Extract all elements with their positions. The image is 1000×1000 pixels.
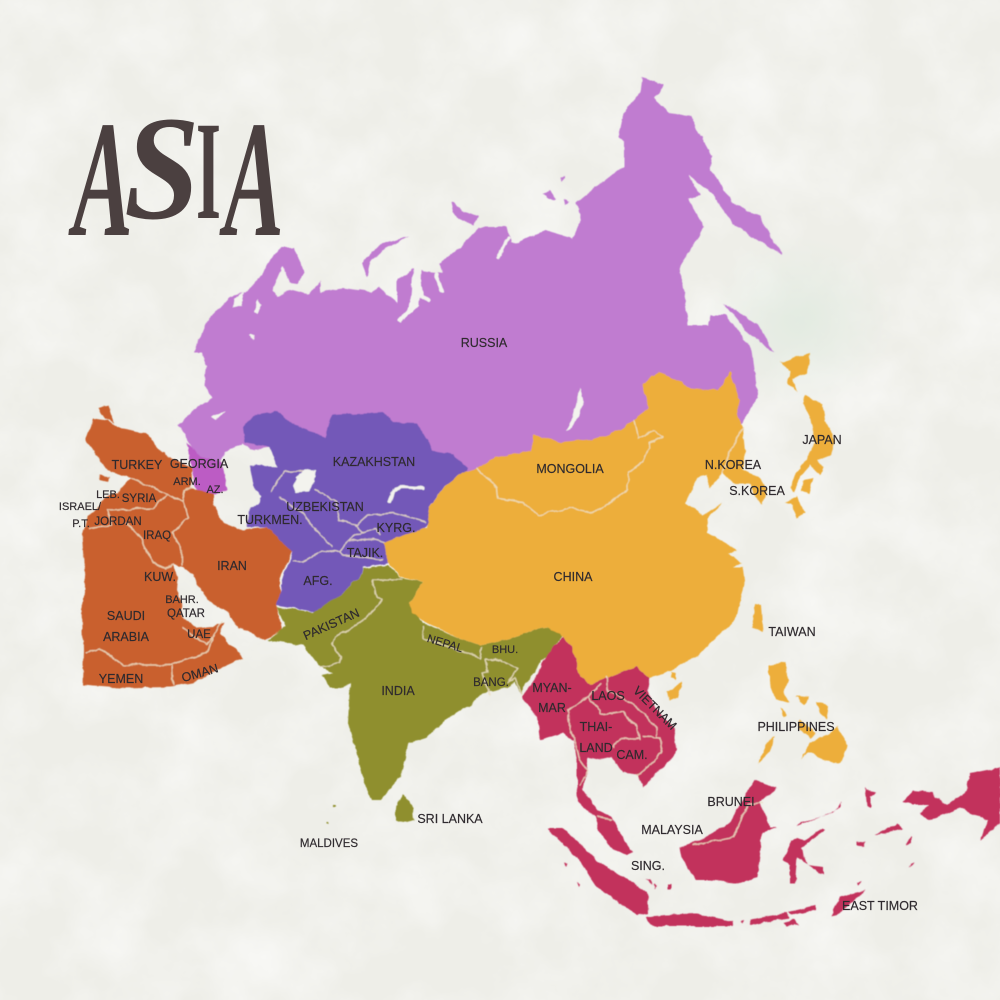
label: Pakistan: PAKISTAN — [301, 606, 362, 643]
label: Nepal: NEPAL — [425, 633, 465, 655]
inlets and lakes — [400, 274, 442, 320]
title: A — [219, 87, 284, 271]
map of Asia — [82, 77, 1000, 926]
borders — [272, 471, 425, 562]
label: East Timor: EAST TIMOR — [842, 899, 918, 913]
label: Armenia: ARM. — [173, 476, 201, 488]
label: Qatar: QATAR — [167, 608, 205, 620]
Philippines — [757, 662, 848, 764]
title: I — [196, 93, 221, 249]
Sulawesi — [783, 802, 842, 883]
title: A — [68, 87, 133, 271]
label: Vietnam: VIETNAM — [630, 684, 679, 733]
small islands near Sumatra — [564, 862, 672, 889]
region: West Asia — [82, 405, 292, 688]
Novaya Zemlya — [361, 236, 409, 277]
label: Uzbekistan: UZBEKISTAN — [286, 500, 364, 514]
label: Myanmar: MYAN- — [532, 681, 572, 695]
label: Russia: RUSSIA — [461, 336, 508, 350]
label: Turkey: TURKEY — [112, 458, 163, 472]
label: Brunei: BRUNEI — [707, 795, 755, 809]
Borneo — [680, 780, 777, 883]
borders — [568, 677, 763, 845]
label: Oman: OMAN — [180, 661, 220, 685]
New Guinea — [902, 767, 1000, 840]
country labels — [59, 336, 918, 913]
label: Laos: LAOS — [591, 689, 625, 703]
borders — [85, 478, 222, 685]
Thrace — [98, 405, 115, 423]
title — [68, 85, 284, 271]
region: Central Asia — [243, 411, 468, 612]
label: Taiwan: TAIWAN — [768, 625, 816, 639]
label: Philippines: PHILIPPINES — [757, 720, 835, 734]
label: Sri Lanka: SRI LANKA — [417, 812, 483, 826]
label: Kyrgyzstan: KYRG. — [377, 521, 415, 535]
label: Georgia: GEORGIA — [170, 457, 229, 471]
label: Azerbaijan: AZ. — [206, 484, 224, 496]
Lake Balkhash — [389, 487, 423, 502]
label: Bahrain: BAHR. — [165, 594, 199, 606]
Sumatra — [547, 828, 648, 915]
label: India: INDIA — [381, 684, 415, 698]
label: Saudi: SAUDI — [107, 609, 145, 623]
label: Cambodia: CAM. — [616, 748, 648, 762]
region: Southeast Asia — [522, 637, 1000, 926]
label: Turkmenistan: TURKMEN. — [237, 513, 303, 527]
Arctic islands — [451, 176, 570, 225]
label: Jordan: JORDAN — [94, 516, 142, 528]
borders — [320, 580, 522, 695]
label: Myanmar continued: MAR — [538, 701, 566, 715]
label: South Korea: S.KOREA — [729, 484, 785, 498]
label: Tajikistan: TAJIK. — [347, 546, 383, 560]
region: Caucasus — [187, 443, 228, 495]
label: Thailand continued: LAND — [579, 741, 613, 755]
label: Bhutan: BHU. — [492, 644, 518, 656]
label: Thailand: THAI- — [580, 720, 612, 734]
region: Russia — [178, 77, 782, 495]
title: S — [124, 85, 200, 250]
label: China: CHINA — [554, 570, 593, 584]
Cyprus — [99, 475, 110, 481]
Hainan — [667, 672, 682, 701]
label: Malaysia: MALAYSIA — [641, 823, 703, 837]
label: Kazakhstan: KAZAKHSTAN — [333, 455, 415, 469]
borders — [477, 420, 743, 515]
label: Iraq: IRAQ — [143, 530, 171, 542]
label: UAE: UAE — [187, 629, 211, 641]
label: Japan: JAPAN — [802, 433, 842, 447]
label: Arabia: ARABIA — [103, 630, 150, 644]
Sri Lanka — [396, 793, 414, 823]
label: Palestinian Territories: P.T. — [72, 518, 90, 530]
Japan — [780, 353, 835, 518]
label: Iran: IRAN — [217, 559, 247, 573]
label: Kuwait: KUW. — [144, 570, 176, 584]
label: Lebanon: LEB. — [96, 489, 120, 501]
Sakhalin — [724, 303, 774, 353]
Maldives dots — [327, 806, 335, 824]
label: Bangladesh: BANG. — [473, 677, 509, 689]
Aral Sea — [293, 469, 316, 493]
Maluku — [857, 787, 915, 868]
Java — [645, 914, 733, 926]
Lesser Sunda — [741, 882, 865, 926]
region: South Asia — [268, 565, 563, 824]
label: Syria: SYRIA — [122, 493, 157, 505]
label: Maldives: MALDIVES — [300, 838, 358, 850]
label: Mongolia: MONGOLIA — [536, 462, 604, 476]
label: North Korea: N.KOREA — [705, 458, 762, 472]
region: East Asia — [383, 353, 848, 764]
label: Afghanistan: AFG. — [303, 574, 333, 588]
label: Yemen: YEMEN — [99, 672, 143, 686]
label: Israel: ISRAEL/ — [59, 501, 102, 513]
label: Singapore: SING. — [631, 859, 665, 873]
Taiwan — [752, 605, 763, 632]
